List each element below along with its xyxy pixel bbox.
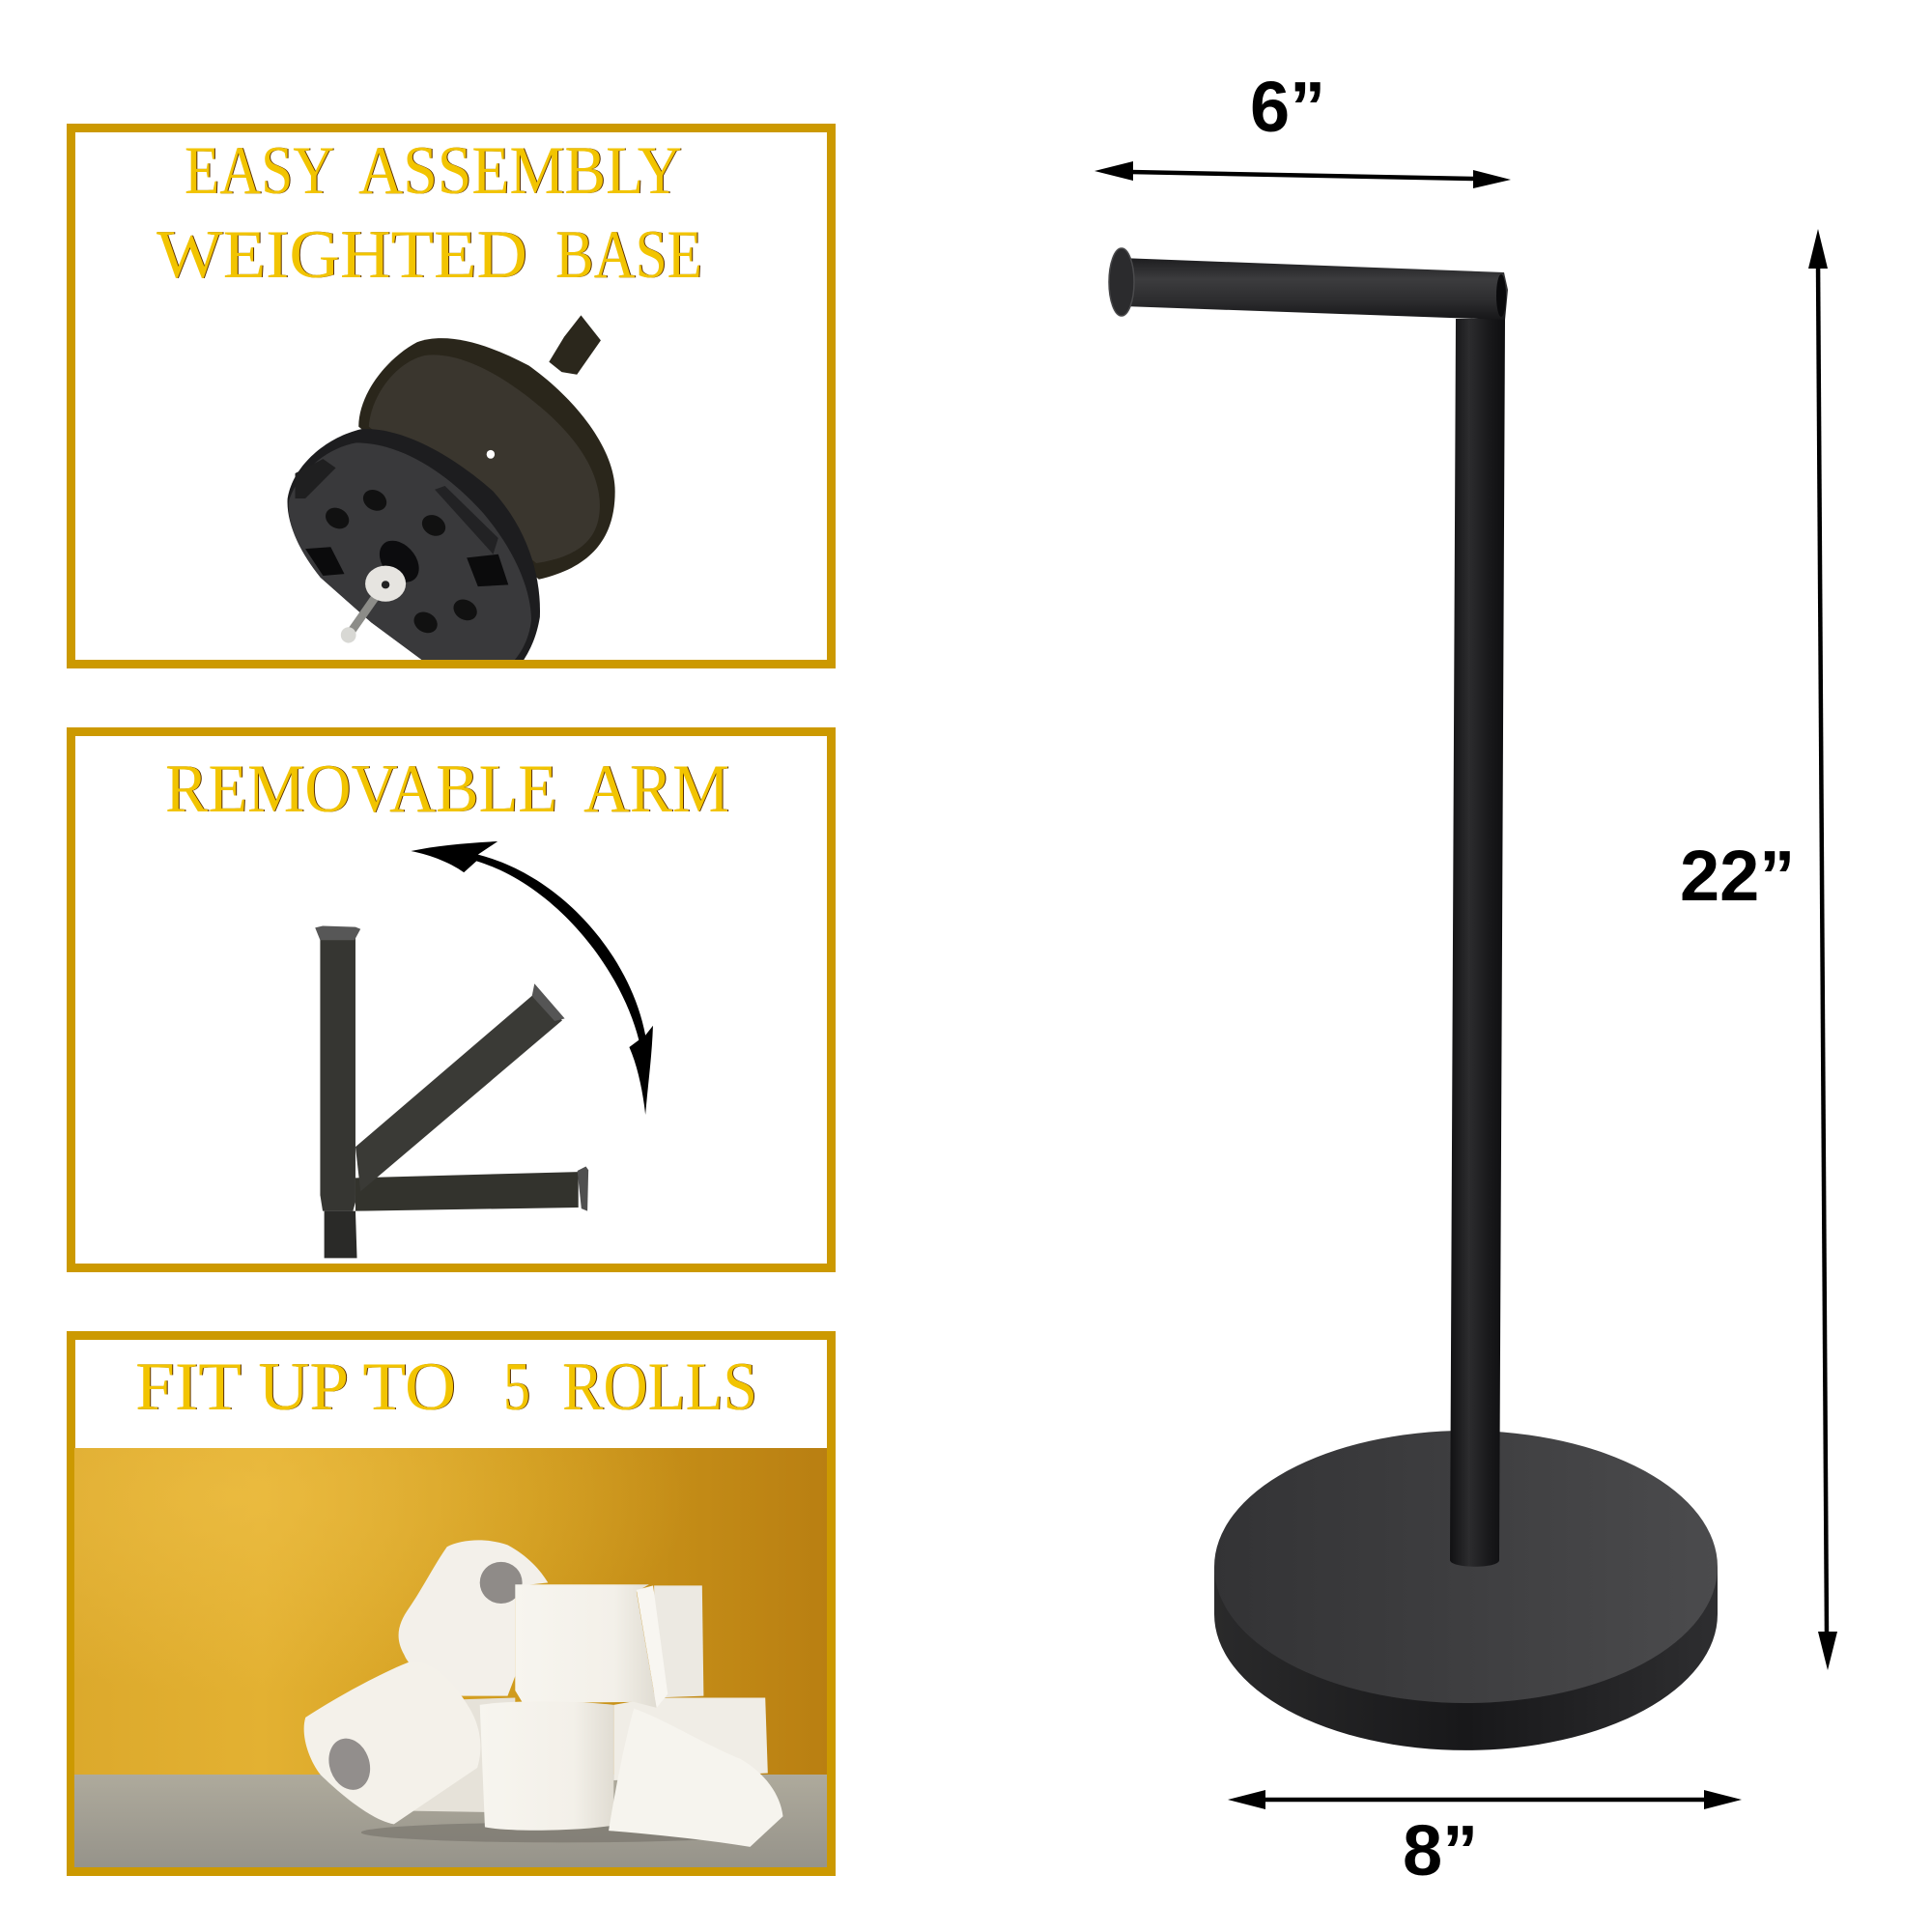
heading: weighted base: BASE bbox=[555, 217, 702, 293]
panel: removable arm bbox=[71, 732, 831, 1267]
photo: toilet paper rolls bbox=[74, 1448, 827, 1867]
icon: arm bbox=[1109, 248, 1508, 320]
panel: easy assembly bbox=[71, 128, 831, 665]
icon: black base disc bbox=[288, 429, 540, 664]
icon: inner dish surface bbox=[369, 355, 600, 563]
dimension: 6 inch width bbox=[1094, 67, 1511, 188]
icon: upper front roll bbox=[515, 1584, 657, 1708]
heading: easy assembly: EASY bbox=[185, 133, 333, 209]
product: free-standing holder bbox=[1109, 248, 1718, 1750]
icon: back right roll bbox=[654, 1585, 703, 1697]
heading: removable arm: ARM bbox=[583, 752, 729, 827]
dimension: 8 inch base bbox=[1228, 1790, 1742, 1890]
icon: lower post bbox=[325, 1211, 357, 1258]
icon: upper tilted roll bbox=[399, 1540, 548, 1696]
arrow: rotation arc bbox=[411, 841, 653, 1115]
icon: shadow on table bbox=[361, 1823, 765, 1842]
icon: diagonal arm bbox=[355, 994, 562, 1191]
icon: lower right roll bbox=[613, 1697, 768, 1780]
icon: post bbox=[1450, 319, 1505, 1567]
dimension: 22 inch height: 22” bbox=[1680, 836, 1795, 916]
icon: unrolled sheet bbox=[609, 1709, 783, 1847]
image: arm positions bbox=[315, 841, 653, 1258]
arrow: height arrow bbox=[1808, 229, 1837, 1670]
icon: bolt and washer bbox=[341, 566, 406, 643]
arrow: width arrow bbox=[1094, 161, 1511, 188]
dimension: 22 inch height bbox=[1680, 229, 1837, 1670]
icon: front tilted roll bbox=[304, 1661, 480, 1824]
heading: fit up to 5 rolls: ROLLS bbox=[562, 1350, 757, 1425]
icon: lower front roll bbox=[480, 1701, 613, 1831]
dimension: 8 inch base: 8” bbox=[1403, 1810, 1478, 1890]
heading: fit up to 5 rolls: 5 bbox=[503, 1350, 530, 1425]
panel: fit up to 5 rolls bbox=[71, 1335, 831, 1872]
heading: fit up to 5 rolls: FIT UP TO bbox=[135, 1350, 456, 1425]
heading: easy assembly: ASSEMBLY bbox=[358, 133, 682, 209]
icon: horizontal arm bbox=[355, 1172, 579, 1211]
icon: base cover dish bbox=[358, 338, 615, 580]
icon: lower back roll bbox=[412, 1697, 515, 1812]
icon: base bbox=[1214, 1431, 1718, 1750]
heading: weighted base: WEIGHTED bbox=[156, 217, 527, 293]
dimension: 6 inch width: 6” bbox=[1250, 67, 1325, 147]
image: exploded weighted base bbox=[288, 315, 615, 664]
heading: removable arm: REMOVABLE bbox=[165, 752, 557, 827]
icon: vertical arm bbox=[320, 938, 355, 1211]
icon: removed arm piece bbox=[549, 315, 601, 375]
arrow: base arrow bbox=[1228, 1790, 1742, 1809]
